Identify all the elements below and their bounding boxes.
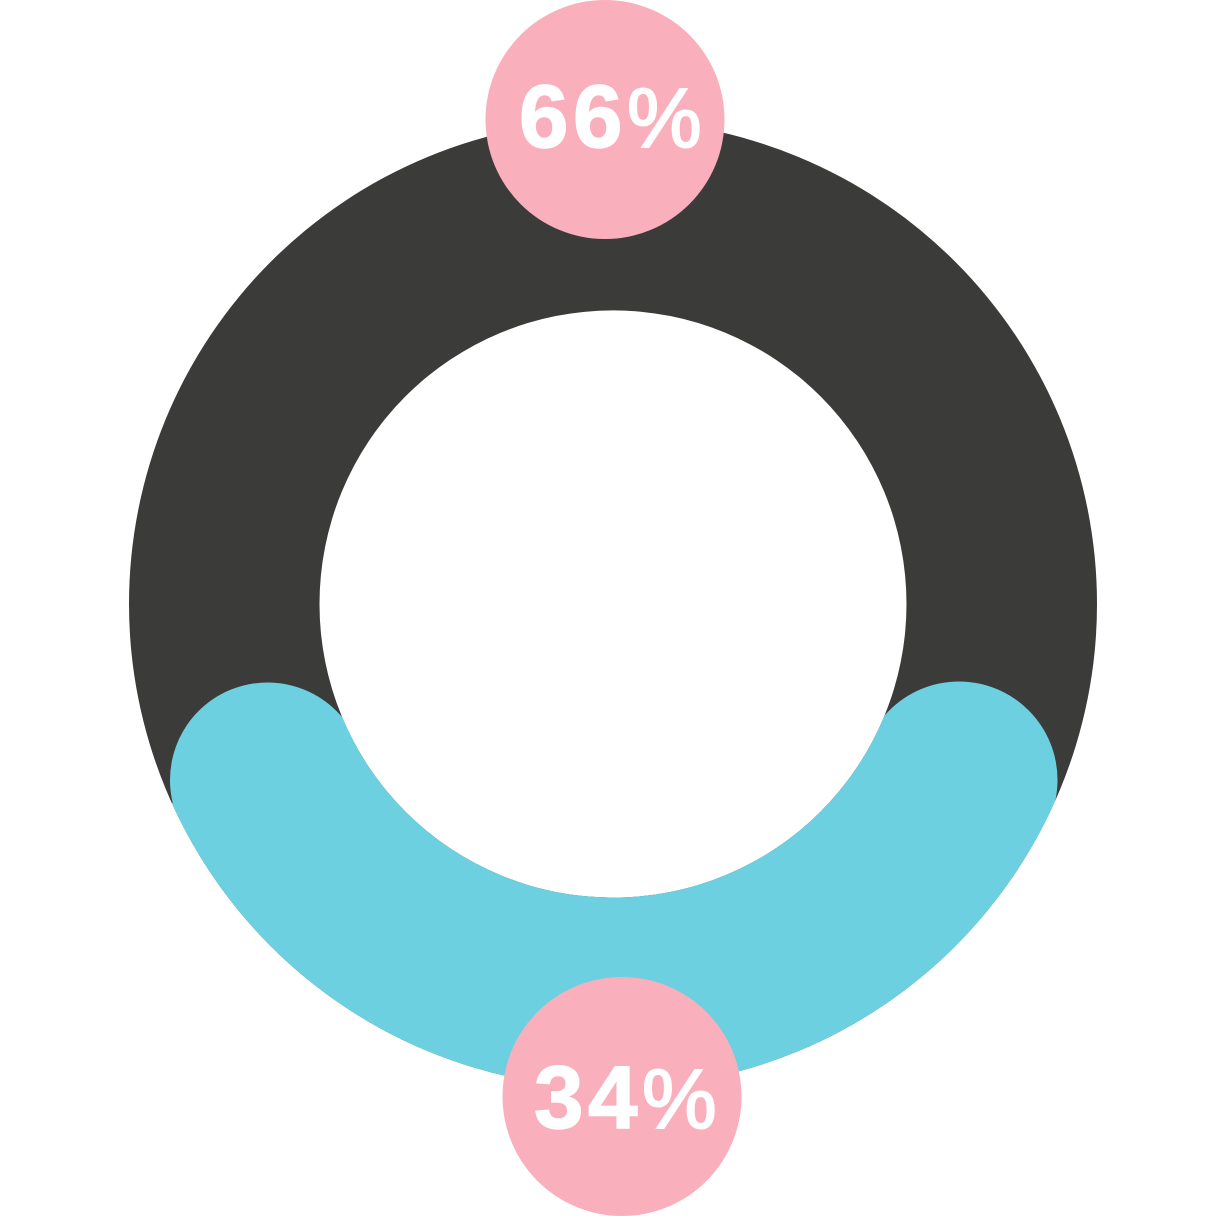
label: 34%: 3 bbox=[534, 1047, 584, 1147]
label: 66%: 6 bbox=[519, 66, 568, 166]
donut chart bbox=[129, 0, 1097, 1216]
badge: 66% bbox=[486, 0, 724, 239]
label: 66%: % bbox=[627, 71, 702, 165]
badge: 34% bbox=[502, 977, 742, 1216]
label: 66%: 6 bbox=[573, 66, 622, 166]
label: 34%: % bbox=[642, 1052, 717, 1146]
dark ring segment: 66% bbox=[129, 120, 1097, 1088]
teal ring segment: 34% bbox=[170, 682, 1058, 1076]
label: 34%: 4 bbox=[588, 1047, 638, 1147]
